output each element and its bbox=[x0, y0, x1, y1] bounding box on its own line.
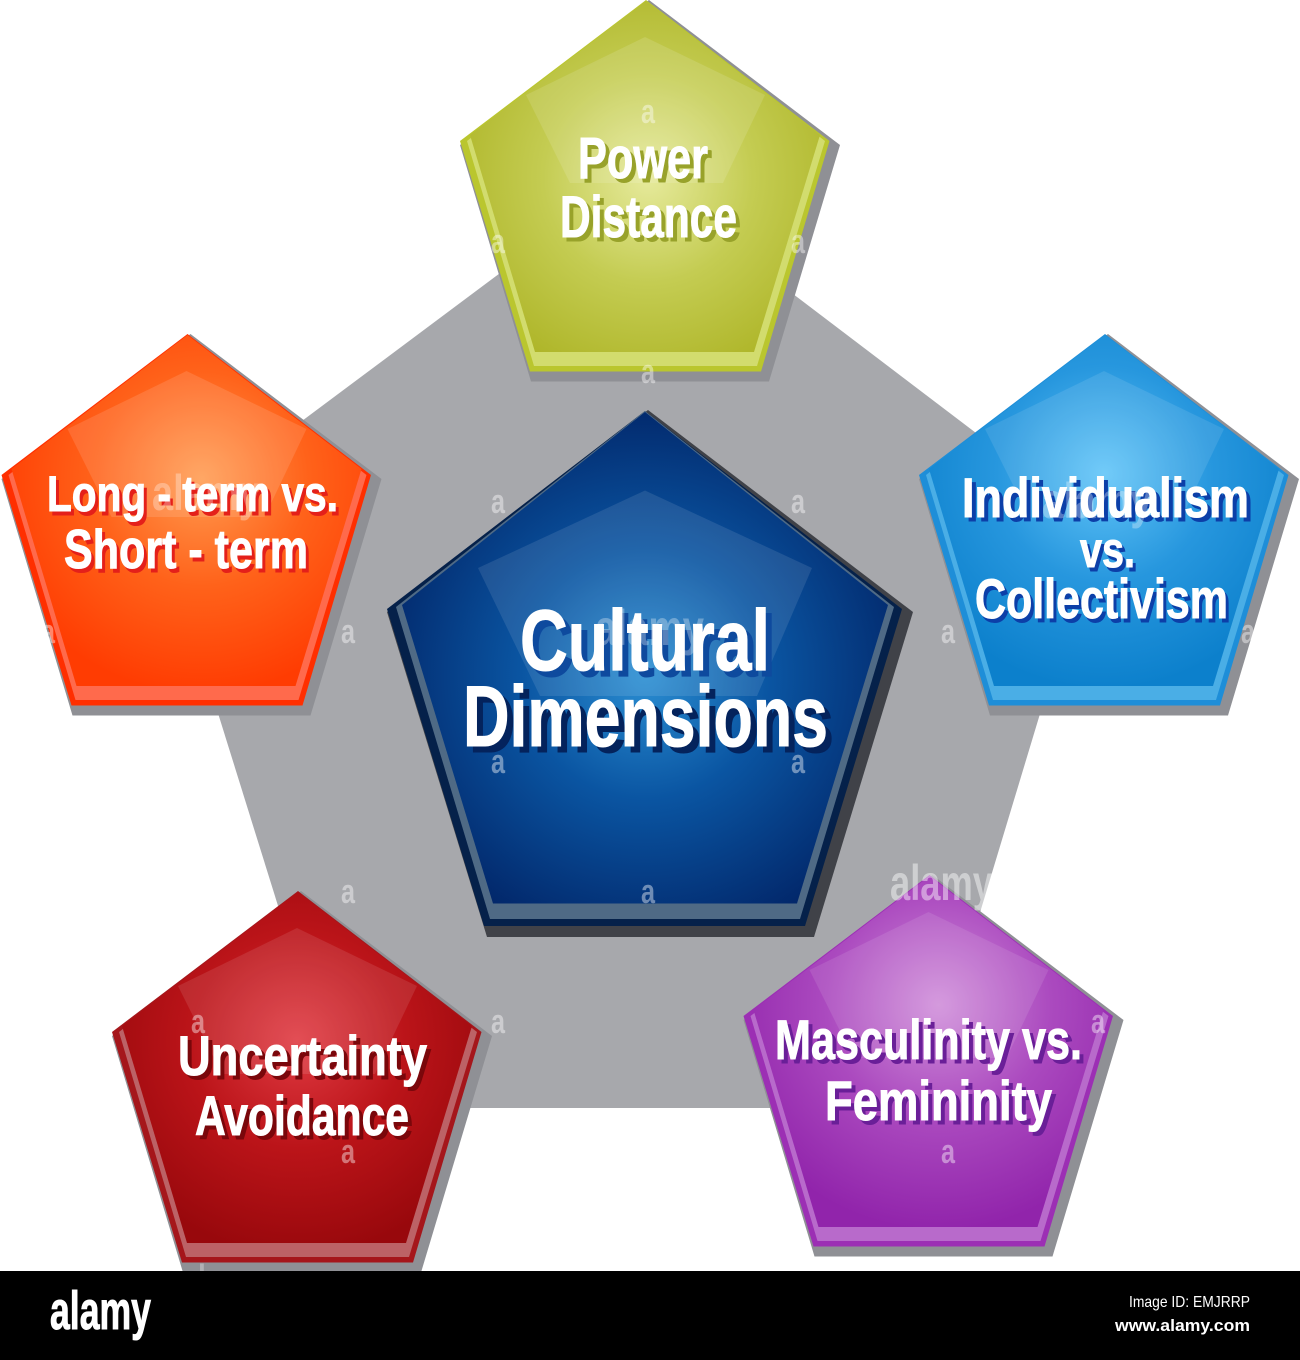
watermarks: a bbox=[491, 483, 506, 521]
watermarks: a bbox=[791, 223, 806, 261]
background panel: grey pentagon bbox=[160, 173, 1097, 1108]
label: Individualism vs. Collectivism bbox=[962, 466, 1253, 634]
label: Masculinity vs. Femininity: Femininity bbox=[825, 1069, 1052, 1132]
label: Uncertainty Avoidance: Uncertainty bbox=[178, 1024, 427, 1087]
watermarks: a bbox=[1091, 1003, 1106, 1041]
panel: Power Distance bbox=[460, 0, 840, 382]
label: Power Distance: Distance bbox=[560, 185, 737, 250]
watermarks: a bbox=[491, 1003, 506, 1041]
label: Individualism vs. Collectivism: vs. bbox=[1083, 526, 1138, 582]
label: Masculinity vs. Femininity: Masculinity vs. bbox=[775, 1008, 1082, 1071]
label: Masculinity vs. Femininity bbox=[775, 1008, 1086, 1136]
label: Long-term vs. Short-term: Short - term bbox=[67, 522, 311, 584]
panel: Masculinity vs. Femininity bbox=[744, 875, 1124, 1256]
label: Individualism vs. Collectivism: Collectivism bbox=[978, 571, 1231, 634]
label: Cultural Dimensions: Cultural bbox=[526, 599, 776, 695]
label: Individualism vs. Collectivism: Collectivism bbox=[975, 567, 1228, 630]
site url: www.alamy.com bbox=[1114, 1316, 1250, 1335]
watermarks: a bbox=[641, 93, 656, 131]
watermarks: alamy bbox=[1042, 473, 1152, 529]
label: Masculinity vs. Femininity: Femininity bbox=[829, 1073, 1056, 1136]
panel: Long-term vs. Short-term bbox=[2, 334, 382, 716]
panel: Individualism vs. Collectivism bbox=[919, 334, 1299, 716]
watermarks: alamy bbox=[890, 855, 993, 911]
label: Masculinity vs. Femininity: Masculinity vs. bbox=[779, 1012, 1086, 1075]
label: Long-term vs. Short-term: Long - term vs. bbox=[50, 470, 341, 526]
watermarks: a bbox=[491, 223, 506, 261]
watermarks: a bbox=[791, 483, 806, 521]
label: Long-term vs. Short-term bbox=[47, 466, 341, 584]
label: Long-term vs. Short-term: Short - term bbox=[64, 518, 308, 580]
label: Power Distance bbox=[560, 126, 741, 254]
image id: Image ID: EMJRRP bbox=[1129, 1294, 1250, 1311]
label: Uncertainty Avoidance bbox=[178, 1024, 431, 1151]
watermarks: alamy bbox=[595, 600, 704, 656]
watermarks: a bbox=[491, 743, 506, 781]
watermarks: a bbox=[641, 353, 656, 391]
watermarks: a bbox=[791, 743, 806, 781]
watermarks: a bbox=[941, 1133, 956, 1171]
label: Uncertainty Avoidance: Uncertainty bbox=[182, 1028, 431, 1091]
watermarks: a bbox=[191, 1003, 206, 1041]
label: Cultural Dimensions: Dimensions bbox=[463, 669, 828, 765]
label: Long-term vs. Short-term: Long - term vs. bbox=[47, 466, 338, 522]
watermarks: a bbox=[341, 1133, 356, 1171]
label: Power Distance: Power bbox=[582, 130, 712, 195]
watermarks: a bbox=[341, 873, 356, 911]
label: Power Distance: Distance bbox=[564, 189, 741, 254]
watermarks: a bbox=[1241, 613, 1256, 651]
panel: Cultural Dimensions centre bbox=[387, 410, 913, 937]
watermarks: a bbox=[941, 613, 956, 651]
watermarks: a bbox=[341, 613, 356, 651]
label: Uncertainty Avoidance: Avoidance bbox=[199, 1088, 413, 1151]
label: Cultural Dimensions: Cultural bbox=[520, 593, 770, 689]
label: Power Distance: Power bbox=[578, 126, 708, 191]
panel: Uncertainty Avoidance bbox=[112, 891, 492, 1272]
watermark bar bbox=[0, 1271, 1300, 1360]
label: Cultural Dimensions: Dimensions bbox=[469, 675, 834, 771]
watermark logo: alamy: alamy bbox=[50, 1281, 151, 1341]
label: Cultural Dimensions bbox=[463, 593, 834, 771]
watermarks: a bbox=[641, 873, 656, 911]
watermarks: alamy bbox=[183, 1255, 260, 1311]
watermarks: a bbox=[41, 613, 56, 651]
label: Uncertainty Avoidance: Avoidance bbox=[195, 1084, 409, 1147]
watermarks: alamy bbox=[152, 465, 260, 521]
label: Individualism vs. Collectivism: vs. bbox=[1080, 522, 1135, 578]
